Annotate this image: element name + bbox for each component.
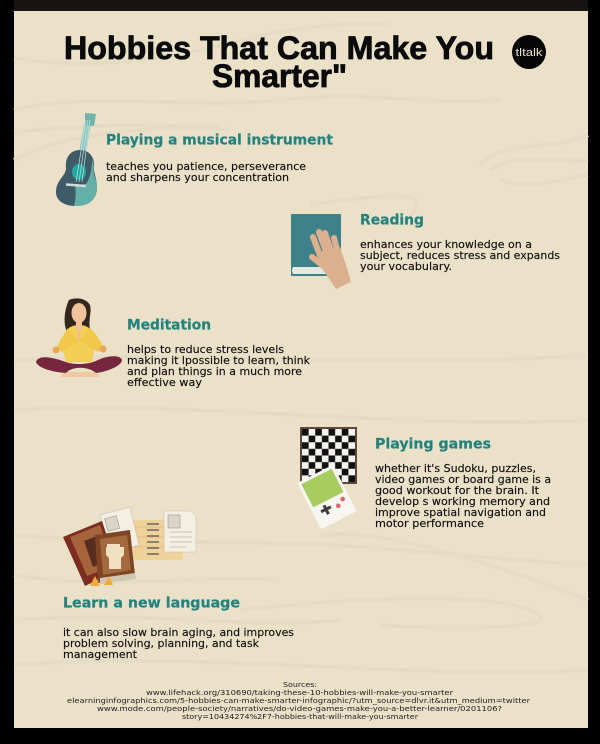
section: learn a new language [63,596,294,661]
icon: meditating woman [36,298,122,377]
sources [67,680,530,721]
section: reading: subject, reduces stress and expands [360,250,560,262]
icon: chessboard and handheld console [297,427,357,529]
section: meditation: helps to reduce stress levels [127,344,284,356]
icon: book with hand [291,214,351,289]
section: learn a new language: problem solving, planning, and task [63,638,260,650]
title: Hobbies That Can Make You [64,30,494,66]
section: meditation [127,318,311,389]
section: meditation: effective way [127,377,202,389]
section: playing games: whether it's Sudoku, puzzles, [375,463,536,475]
icon: guitar [56,113,97,206]
section: playing games: motor performance [375,518,484,530]
section: playing a musical instrument: and sharpens your concentration [106,172,289,184]
section: reading [360,212,560,273]
sources: elearninginfographics.com/5-hobbies-can-make-smarter-infographic/?utm_source=dlvr.it&utm_medium=twitter [67,696,530,705]
section: meditation: Meditation [127,318,211,334]
section: reading: Reading [360,212,424,228]
section: playing games: develop s working memory and [375,496,550,508]
sources: story=10434274%2F7-hobbies-that-will-make-you-smarter [182,712,418,721]
section: playing a musical instrument: Playing a musical instrument [106,132,333,148]
section: learn a new language: it can also slow brain aging, and improves [63,627,294,639]
section: playing games: Playing games [375,436,491,452]
section: playing games: good workout for the brain. It [375,485,539,497]
sources: Sources: [283,680,317,689]
title: Smarter" [212,58,347,94]
section: reading: your vocabulary. [360,261,452,273]
sources: www.mode.com/people-society/narratives/do-video-games-make-you-a-better-learner/0201106? [97,704,502,713]
title [64,30,494,94]
section: playing games: video games or board game is a [375,474,551,486]
section: playing games [375,436,551,530]
logo: tltalk badge: tltalk [516,47,543,59]
section: reading: enhances your knowledge on a [360,239,532,251]
section: playing a musical instrument [106,132,333,184]
icon: books and notebooks [63,507,196,586]
section: playing games: improve spatial navigation and [375,507,546,519]
section: learn a new language: Learn a new language [63,596,240,612]
section: meditation: making it lpossible to learn, think [127,355,311,367]
logo: tltalk badge [512,35,546,69]
section: playing a musical instrument: teaches you patience, perseverance [106,161,306,173]
section: learn a new language: management [63,649,137,661]
sources: www.lifehack.org/310690/taking-these-10-hobbies-will-make-you-smarter [146,688,453,697]
section: meditation: and plan things in a much more [127,366,302,378]
